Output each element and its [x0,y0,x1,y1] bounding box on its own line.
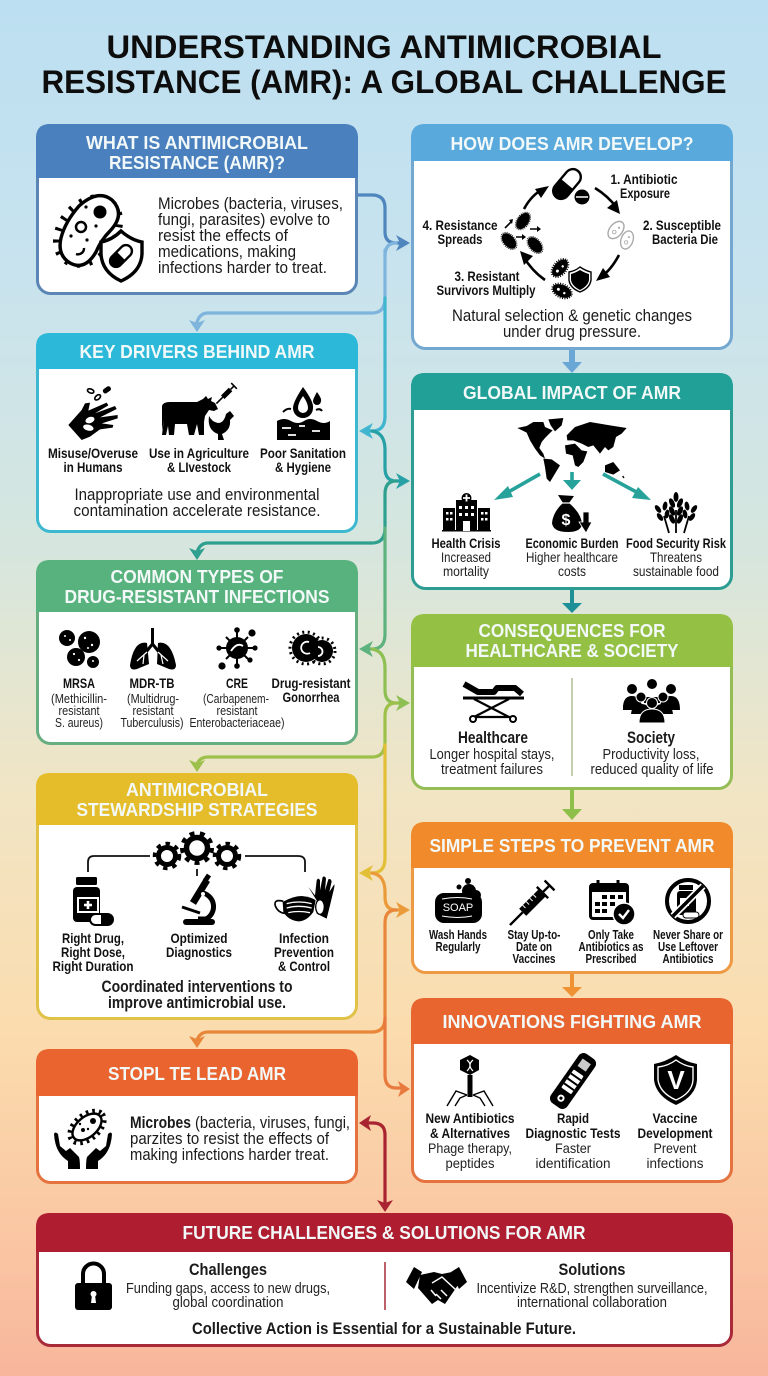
icon: soap [435,878,482,923]
icon: no leftover antibiotics [667,880,709,922]
labels: strategies: Right Dose, [61,944,125,960]
text: stewardship summary: Coordinated interventions to [102,978,292,996]
text: healthcare and society: treatment failures [441,761,543,778]
text: microbes description [130,1114,350,1164]
labels: driver names: & LIvestock [167,459,231,475]
text: drivers summary [74,486,320,520]
labels: infection types: (Carbapenem- [203,692,269,706]
labels: driver names: & Hygiene [275,459,331,475]
labels: strategies: & Control [278,958,330,974]
labels: prevention steps [429,927,723,966]
labels: cycle steps [422,171,721,298]
labels: infection types: resistant [216,704,258,718]
heading: key drivers: KEY DRIVERS BEHIND AMR [80,341,314,362]
text: microbes description: making infections harder treat. [130,1146,329,1164]
labels: infection types: (Methicillin- [51,692,107,706]
labels: prevention steps: Antibiotics as [578,939,644,954]
heading: consequences: CONSEQUENCES FOR [478,620,666,641]
labels: innovations: New Antibiotics [426,1110,515,1126]
icon: handshake [406,1267,467,1304]
icon: hand with pills [68,385,118,440]
labels: prevention steps: Never Share or [653,927,723,942]
text: challenges: Funding gaps, access to new drugs, [126,1281,330,1297]
heading: innovations: INNOVATIONS FIGHTING AMR [442,1011,702,1032]
text: healthcare and society: Longer hospital stays, [430,746,554,763]
labels: innovations: & Alternatives [430,1125,510,1141]
heading: what is AMR [86,132,308,173]
connector arrows: right column [562,349,582,997]
text: solutions [476,1260,708,1311]
icon: money bag: $ [562,512,571,529]
text: AMR definition [158,195,343,277]
labels: infection types: MRSA [63,675,95,691]
labels: prevention steps: Use Leftover [658,939,718,954]
labels: cycle steps: 2. Susceptible [643,217,721,233]
panel: future challenges and solutions [36,1213,733,1346]
panel: innovations [411,998,733,1182]
heading: future challenges: FUTURE CHALLENGES & SOLUTIONS FOR AMR [182,1222,586,1243]
heading: how AMR develops: HOW DOES AMR DEVELOP? [450,133,694,154]
icon: gonorrhea diplococci [290,632,335,664]
icon: bacteriophage [447,1055,493,1106]
diagram: resistance cycle [498,166,636,302]
heading: common infections [64,566,330,607]
heading: stewardship: STEWARDSHIP STRATEGIES [76,799,318,820]
icon: calendar with check [590,880,635,925]
labels: impact areas: Threatens [650,549,702,565]
icon: padlock [75,1264,112,1310]
icon: CRE virus [216,627,258,670]
text: drivers summary: contamination accelerate resistance. [74,502,320,520]
text: drivers summary: Inappropriate use and environmental [74,486,320,504]
labels: infection types: MDR-TB [130,675,174,691]
labels: strategies: Diagnostics [166,944,232,960]
labels: innovations [426,1110,713,1171]
text: AMR definition: infections harder to treat. [158,259,327,277]
icon: gears with bracket [88,833,305,876]
heading: common infections: DRUG-RESISTANT INFECTIONS [64,586,330,607]
text: call to action: Collective Action is Essential for a Sustainable Future. [192,1320,576,1338]
arrows: map to impacts [494,472,651,500]
text: microbes description: parzites to resist the effects of [130,1130,329,1148]
labels: innovations: Diagnostic Tests [526,1125,621,1141]
text: microbes description: (bacteria, viruses, fungi, [195,1114,350,1132]
text: AMR definition: medications, making [158,243,296,261]
labels: driver names: Misuse/Overuse [48,445,138,461]
labels: impact areas: Health Crisis [432,535,501,551]
text: healthcare and society: reduced quality of life [590,761,714,778]
heading: global impact: GLOBAL IMPACT OF AMR [463,382,681,403]
labels: prevention steps: Date on [516,939,552,954]
text: natural selection: Natural selection & genetic changes [452,307,692,325]
text: solutions: international collaboration [517,1295,667,1311]
heading: common infections: COMMON TYPES OF [110,566,284,587]
icon: vaccine shield [654,1055,697,1105]
labels: prevention steps: Antibiotics [662,951,714,966]
text: challenges: global coordination [172,1295,284,1311]
labels: infection types: (Multidrug- [127,692,179,706]
labels: prevention steps: Regularly [436,939,481,954]
labels: infection types: resistant [132,704,174,718]
labels: innovations: infections [646,1155,704,1171]
panel: common infections [36,560,358,744]
heading: consequences [466,620,679,661]
text: microbes description: Microbes [130,1114,191,1132]
icon: stretcher [463,684,524,722]
icon: money bag [552,495,592,533]
text: challenges: Challenges [189,1260,267,1279]
heading: what is AMR: WHAT IS ANTIMICROBIAL [86,132,308,153]
labels: cycle steps: Exposure [620,185,670,201]
labels: impact areas: mortality [443,563,489,579]
labels: infection types: Enterobacteriaceae) [190,716,284,730]
labels: cycle steps: Bacteria Die [652,231,718,247]
labels: strategies: Prevention [274,944,334,960]
labels: infection types: Tuberculusis) [120,716,184,730]
labels: innovations: Rapid [557,1110,589,1126]
labels: cycle steps: Survivors Multiply [436,282,536,298]
title: RESISTANCE (AMR): A GLOBAL CHALLENGE [42,64,726,100]
text: AMR definition: resist the effects of [158,227,288,245]
labels: impact areas [432,535,726,579]
icon: rapid diagnostic test [548,1051,598,1111]
labels: driver names: in Humans [64,459,123,475]
icon: lungs [130,628,176,670]
labels: infection types: S. aureus) [55,716,103,730]
labels: innovations: Vaccine [652,1110,698,1126]
title [42,29,726,100]
icon: mask and glove [275,876,334,921]
labels: strategies: Optimized [170,930,228,946]
text: AMR definition: Microbes (bacteria, viruses, [158,195,343,213]
labels: impact areas: Higher healthcare [526,549,618,565]
panel: stopl te lead AMR [36,1049,358,1182]
labels: cycle steps: 1. Antibiotic [610,171,678,187]
text: healthcare and society: Healthcare [458,729,528,747]
icon: soap: SOAP [443,902,473,914]
icon: MRSA cocci [59,630,100,668]
labels: innovations: Faster [555,1140,591,1156]
icon: cow, chicken and syringe [162,383,237,440]
panel: key drivers [36,333,358,532]
labels: driver names: Poor Sanitation [260,445,346,461]
labels: driver names: Use in Agriculture [149,445,249,461]
icon: hospital [442,493,491,532]
icon: hands holding microbe [54,1105,112,1169]
labels: impact areas: Food Security Risk [626,535,726,551]
labels: impact areas: costs [558,563,586,579]
title: UNDERSTANDING ANTIMICROBIAL [106,29,662,65]
labels: infection types: resistant [58,704,100,718]
panel: global impact [411,373,733,588]
labels: strategies [52,930,334,974]
icon: world map [517,418,627,482]
labels: cycle steps: 3. Resistant [454,268,520,284]
labels: cycle steps: 4. Resistance [422,217,498,233]
labels: strategies: Infection [279,930,329,946]
labels: infection types [51,675,351,730]
heading: what is AMR: RESISTANCE (AMR)? [109,152,285,173]
text: solutions: Solutions [558,1260,626,1279]
panel: what is AMR [36,124,358,294]
labels: impact areas: sustainable food [633,563,719,579]
labels: infection types: Gonorrhea [282,689,340,705]
icon: people group [623,679,680,723]
text: solutions: Incentivize R&D, strengthen surveillance, [476,1281,708,1297]
connector arrows: left network [189,195,410,1212]
icon: wheat [654,492,698,533]
text: healthcare and society [430,729,714,778]
heading: stopl te lead AMR: STOPL TE LEAD AMR [108,1063,286,1084]
labels: innovations: Prevent [654,1140,697,1156]
text: natural selection [452,307,692,341]
labels: prevention steps: Prescribed [586,951,637,966]
text: AMR definition: fungi, parasites) evolve to [158,211,330,229]
labels: innovations: identification [536,1155,610,1171]
labels: innovations: Development [638,1125,713,1141]
panel: consequences [411,614,733,788]
icon: syringe [504,880,555,931]
labels: prevention steps: Stay Up-to- [508,927,560,942]
text: healthcare and society: Productivity loss, [602,746,700,763]
labels: infection types: Drug-resistant [272,675,351,691]
icon: medicine bottle [73,877,114,925]
text: healthcare and society: Society [627,729,676,747]
text: stewardship summary: improve antimicrobial use. [108,994,286,1012]
labels: cycle steps: Spreads [438,231,483,247]
labels: prevention steps: Only Take [588,927,634,942]
labels: prevention steps: Wash Hands [429,927,487,942]
text: challenges [126,1260,330,1311]
labels: driver names [48,445,346,475]
panel: stewardship [36,773,358,1018]
icon: bacterium and shield [44,185,142,281]
panel: how AMR develops [411,124,733,348]
icon: microscope [182,875,215,925]
labels: impact areas: Economic Burden [526,535,618,551]
labels: impact areas: Increased [441,549,491,565]
heading: stewardship: ANTIMICROBIAL [126,779,268,800]
labels: strategies: Right Drug, [62,930,124,946]
labels: innovations: Phage therapy, [428,1140,512,1156]
heading: consequences: HEALTHCARE & SOCIETY [466,640,679,661]
text: natural selection: under drug pressure. [503,323,641,341]
panel: simple steps [411,822,733,972]
labels: prevention steps: Vaccines [512,951,556,966]
heading: simple steps: SIMPLE STEPS TO PREVENT AMR [430,835,714,856]
text: stewardship summary [102,978,292,1012]
labels: innovations: peptides [446,1155,494,1171]
heading: stewardship [76,779,318,820]
labels: infection types: CRE [226,675,248,691]
icon: vaccine shield: V [667,1065,685,1095]
icon: water drops and polluted water [277,387,330,440]
labels: strategies: Right Duration [52,958,134,974]
